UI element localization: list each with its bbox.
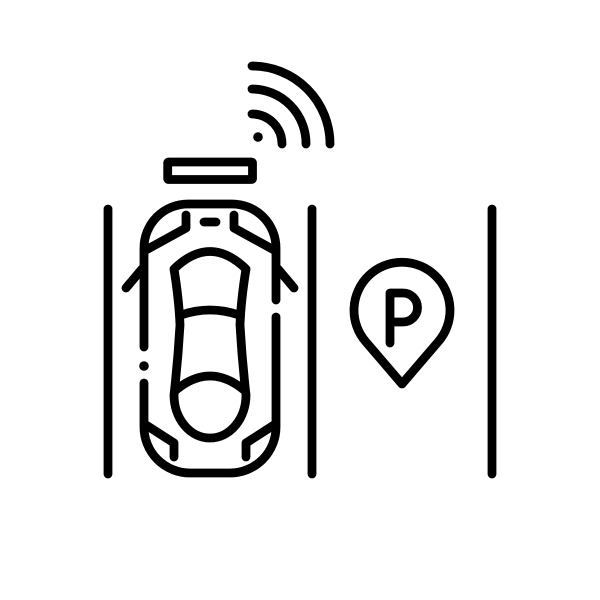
letter P mark bbox=[390, 293, 418, 343]
parking lane lines bbox=[108, 209, 492, 474]
roof and rear window lines bbox=[176, 310, 244, 390]
hood lines and badge bbox=[146, 215, 274, 250]
parking location pin bbox=[354, 262, 450, 384]
icon: wifi signal bbox=[252, 66, 330, 144]
body dot bbox=[139, 361, 149, 371]
car top view bbox=[126, 204, 294, 473]
side mirrors bbox=[126, 269, 294, 288]
car body outline bbox=[144, 204, 276, 473]
rear lights bbox=[146, 425, 274, 457]
cabin bbox=[174, 252, 246, 438]
sensor bar bbox=[168, 162, 252, 180]
